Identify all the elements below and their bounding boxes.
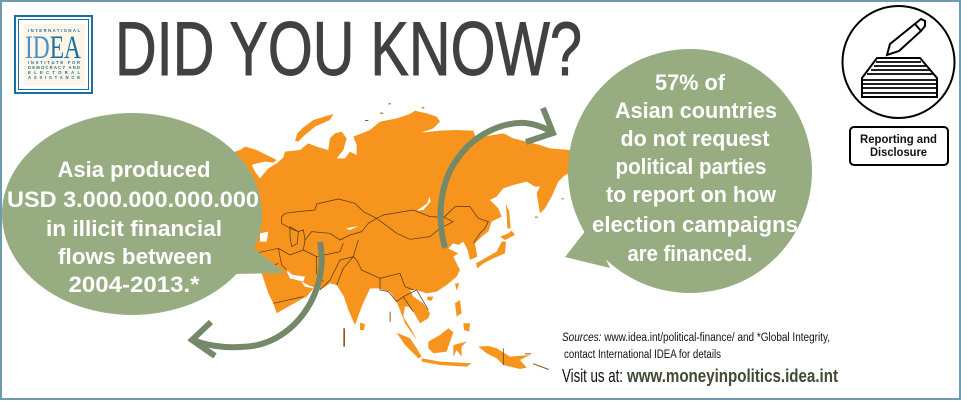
left speech bubble xyxy=(2,113,285,315)
right bubble text: political parties xyxy=(616,154,766,179)
logo: INTERNATIONAL xyxy=(28,28,80,33)
mainland xyxy=(230,111,587,340)
dotted small islands xyxy=(343,103,564,370)
logo: ELECTORAL xyxy=(28,70,80,75)
logo: IDEA xyxy=(25,30,81,66)
arrow: to right bubble xyxy=(441,108,553,248)
right speech bubble xyxy=(565,49,812,293)
map of Asia xyxy=(230,103,587,370)
arrow: to left bubble xyxy=(192,242,322,356)
right bubble text: are financed. xyxy=(628,241,752,266)
left bubble text: USD 3.000.000.000.000 xyxy=(7,187,259,212)
right bubble text: to report on how xyxy=(606,182,777,207)
left bubble text: in illicit financial xyxy=(46,216,222,241)
right bubble text xyxy=(592,70,798,266)
islands xyxy=(295,114,333,142)
icon: reporting xyxy=(842,6,954,118)
logo xyxy=(14,15,93,94)
logo: INSTITUTE FOR xyxy=(28,60,80,65)
website link: Visit us at: xyxy=(562,366,623,386)
right bubble text: Asian countries xyxy=(615,98,777,123)
right bubble text: 57% of xyxy=(655,70,726,95)
title: DID YOU KNOW? xyxy=(115,7,582,92)
country borders xyxy=(255,199,503,365)
left bubble text: Asia produced xyxy=(58,157,210,182)
seas and lakes xyxy=(260,197,458,282)
sources xyxy=(562,332,830,361)
left bubble text: flows between xyxy=(58,244,212,269)
label: reporting and disclosure: Disclosure xyxy=(870,145,927,159)
logo: DEMOCRACY AND xyxy=(28,65,80,70)
left bubble text: 2004-2013.* xyxy=(68,272,200,297)
website link xyxy=(562,366,838,386)
logo: ASSISTANCE xyxy=(28,75,80,80)
label: reporting and disclosure xyxy=(850,127,948,165)
pencil xyxy=(887,19,925,55)
label: reporting and disclosure: Reporting and xyxy=(860,132,937,146)
sources: contact International IDEA for details xyxy=(564,349,721,361)
left bubble text xyxy=(7,157,259,297)
right bubble text: do not request xyxy=(620,126,770,151)
right bubble text: election campaigns xyxy=(592,212,798,237)
website link: www.moneyinpolitics.idea.int xyxy=(626,366,838,386)
sources: Sources: www.idea.int/political-finance/ and *Global Integrity, xyxy=(562,332,830,344)
